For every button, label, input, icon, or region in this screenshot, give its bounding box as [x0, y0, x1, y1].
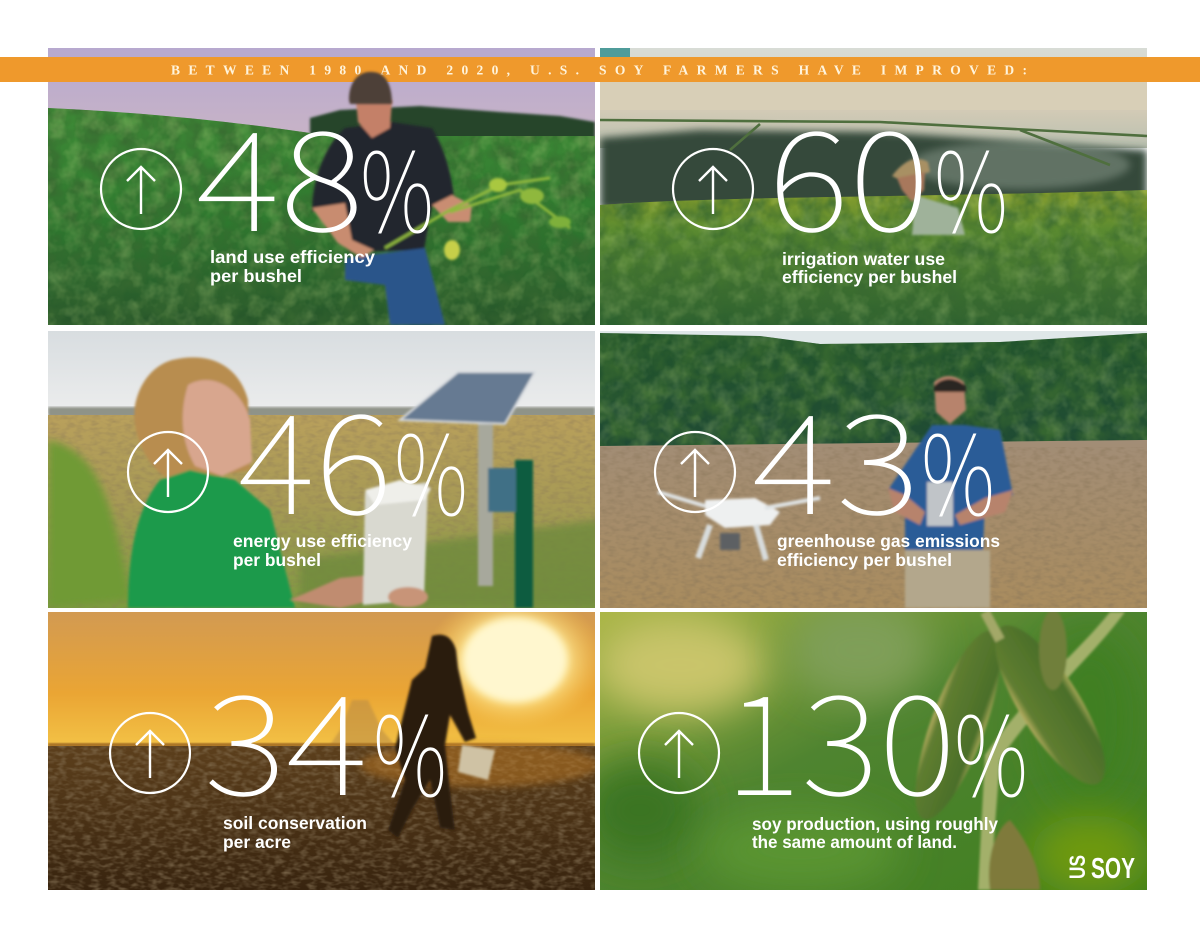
panel: land use efficiency	[48, 48, 595, 325]
percent sign: %	[954, 668, 1028, 828]
logo: US SOY	[1065, 853, 1135, 885]
label: the same amount of land.	[752, 832, 957, 852]
photo: woman with solar sensor in field	[48, 331, 600, 608]
panel: energy use efficiency	[48, 331, 600, 608]
photo: close-up of soybean pods	[580, 600, 1150, 895]
stat: 34%	[110, 635, 447, 852]
logo: US SOY: SOY	[1091, 853, 1135, 885]
percent sign: %	[394, 387, 468, 547]
icon: up arrow in circle	[639, 713, 719, 793]
icon: up arrow in circle	[101, 149, 181, 229]
stat: 60%	[673, 71, 1008, 287]
banner bar	[0, 57, 1200, 82]
label: soy production, using roughly	[752, 814, 998, 834]
label: per bushel	[210, 266, 302, 286]
percent sign: %	[921, 387, 995, 547]
photo: farmer in soybean field	[48, 48, 595, 325]
panel: greenhouse gas emissions efficiency	[600, 331, 1147, 608]
number: 60	[768, 71, 930, 272]
banner	[0, 57, 1200, 82]
number: 34	[204, 635, 368, 836]
stat: 130%	[639, 635, 1028, 852]
label: greenhouse gas emissions	[777, 531, 1000, 551]
panel: irrigation water use efficiency	[600, 48, 1147, 325]
number: 130	[724, 635, 956, 836]
percent sign: %	[934, 104, 1008, 264]
panel: soy production	[580, 600, 1150, 895]
percent sign: %	[360, 104, 434, 264]
label: land use efficiency	[210, 247, 375, 267]
icon: up arrow in circle	[655, 432, 735, 512]
logo: US SOY: US	[1065, 855, 1090, 879]
percent sign: %	[373, 668, 447, 828]
icon: up arrow in circle	[110, 713, 190, 793]
photo: farmer flying drone over field	[600, 331, 1147, 608]
panel: soil conservation	[48, 590, 605, 890]
number: 48	[196, 71, 364, 272]
label: efficiency per bushel	[782, 267, 957, 287]
icon: up arrow in circle	[128, 432, 208, 512]
stat: 43%	[655, 354, 1000, 570]
label: per acre	[223, 832, 291, 852]
label: soil conservation	[223, 813, 367, 833]
photo: irrigation over soybean field	[600, 48, 1147, 325]
label: irrigation water use	[782, 249, 945, 269]
photo: woman silhouette at sunset	[48, 590, 605, 890]
banner heading: BETWEEN 1980 AND 2020, U.S. SOY FARMERS HAVE IMPROVED:	[171, 62, 1027, 78]
number: 46	[238, 354, 392, 555]
stat: 48%	[101, 71, 434, 286]
label: energy use efficiency	[233, 531, 412, 551]
stat: 46%	[128, 354, 468, 570]
number: 43	[752, 354, 920, 555]
icon: up arrow in circle	[673, 149, 753, 229]
label: per bushel	[233, 550, 321, 570]
farmer's head over banner	[349, 72, 392, 104]
label: efficiency per bushel	[777, 550, 952, 570]
